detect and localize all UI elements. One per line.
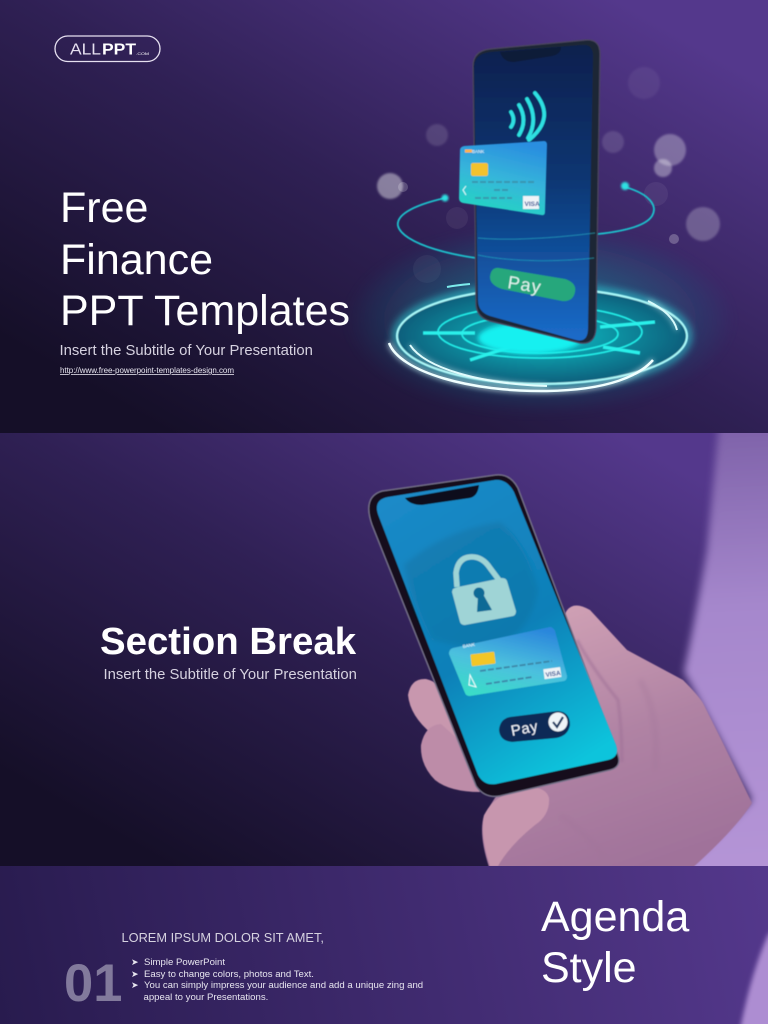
hand <box>408 605 752 870</box>
decorative bokeh circles <box>377 67 720 283</box>
logo: ALLPPT: ALL <box>70 42 101 58</box>
heading: Section Break <box>100 620 357 663</box>
bullet list: Simple PowerPoint <box>144 957 225 968</box>
notch <box>405 485 479 505</box>
orbit ring, front <box>478 233 595 261</box>
icon: contactless waves <box>511 93 544 140</box>
agenda heading: LOREM IPSUM DOLOR SIT AMET, <box>122 930 324 945</box>
card chip <box>471 163 488 176</box>
notch <box>500 47 561 62</box>
bullet list: Easy to change colors, photos and Text. <box>144 969 314 980</box>
bullet list: ➤ <box>131 980 139 990</box>
sleeve <box>738 932 768 1024</box>
pay button <box>499 711 570 742</box>
visa badge: VISA <box>545 670 561 679</box>
phone: contactless payment <box>473 40 600 343</box>
hologram platform <box>345 225 735 415</box>
title: Free <box>60 184 148 232</box>
title: Finance <box>60 236 213 284</box>
credit card <box>459 141 547 215</box>
palm <box>482 605 752 870</box>
bullet list: ➤ <box>131 957 139 967</box>
bullet list: appeal to your Presentations. <box>144 992 268 1003</box>
orbit ring, back half <box>398 187 654 262</box>
thumb <box>483 788 549 866</box>
icon: padlock <box>452 557 516 625</box>
credit card: BANK <box>472 149 484 154</box>
subtitle: Insert the Subtitle of Your Presentation <box>104 667 357 683</box>
pay button: Pay <box>506 272 543 297</box>
title: PPT Templates <box>60 287 350 335</box>
shield <box>404 522 538 650</box>
pay button: Pay <box>510 718 540 740</box>
credit card: BANK <box>462 642 475 649</box>
number: 01 <box>64 954 122 1013</box>
panel: section break slide <box>0 433 768 866</box>
agenda title: Style <box>541 944 637 992</box>
pay button <box>490 268 575 301</box>
link: http://www.free-powerpoint-templates-design.com <box>60 366 234 375</box>
panel: agenda slide <box>0 866 768 1024</box>
bullet list <box>131 957 423 1003</box>
agenda title <box>541 893 689 992</box>
orbit ring endpoints <box>442 182 629 202</box>
sleeve <box>680 433 768 866</box>
agenda title: Agenda <box>541 893 689 941</box>
credit card <box>449 627 567 696</box>
logo: ALLPPT: PPT <box>102 42 136 58</box>
subtitle: Insert the Subtitle of Your Presentation <box>60 343 313 359</box>
logo: ALLPPT <box>55 36 160 62</box>
visa badge: VISA <box>524 201 540 208</box>
panel: title slide <box>0 0 768 433</box>
title <box>60 184 350 335</box>
logo: ALLPPT: .COM <box>136 51 149 56</box>
bullet list: You can simply impress your audience and add a unique zing and <box>144 980 423 991</box>
phone: security lock <box>369 475 619 797</box>
bullet list: ➤ <box>131 969 139 979</box>
upper finger <box>407 678 457 739</box>
lower finger <box>421 724 480 792</box>
